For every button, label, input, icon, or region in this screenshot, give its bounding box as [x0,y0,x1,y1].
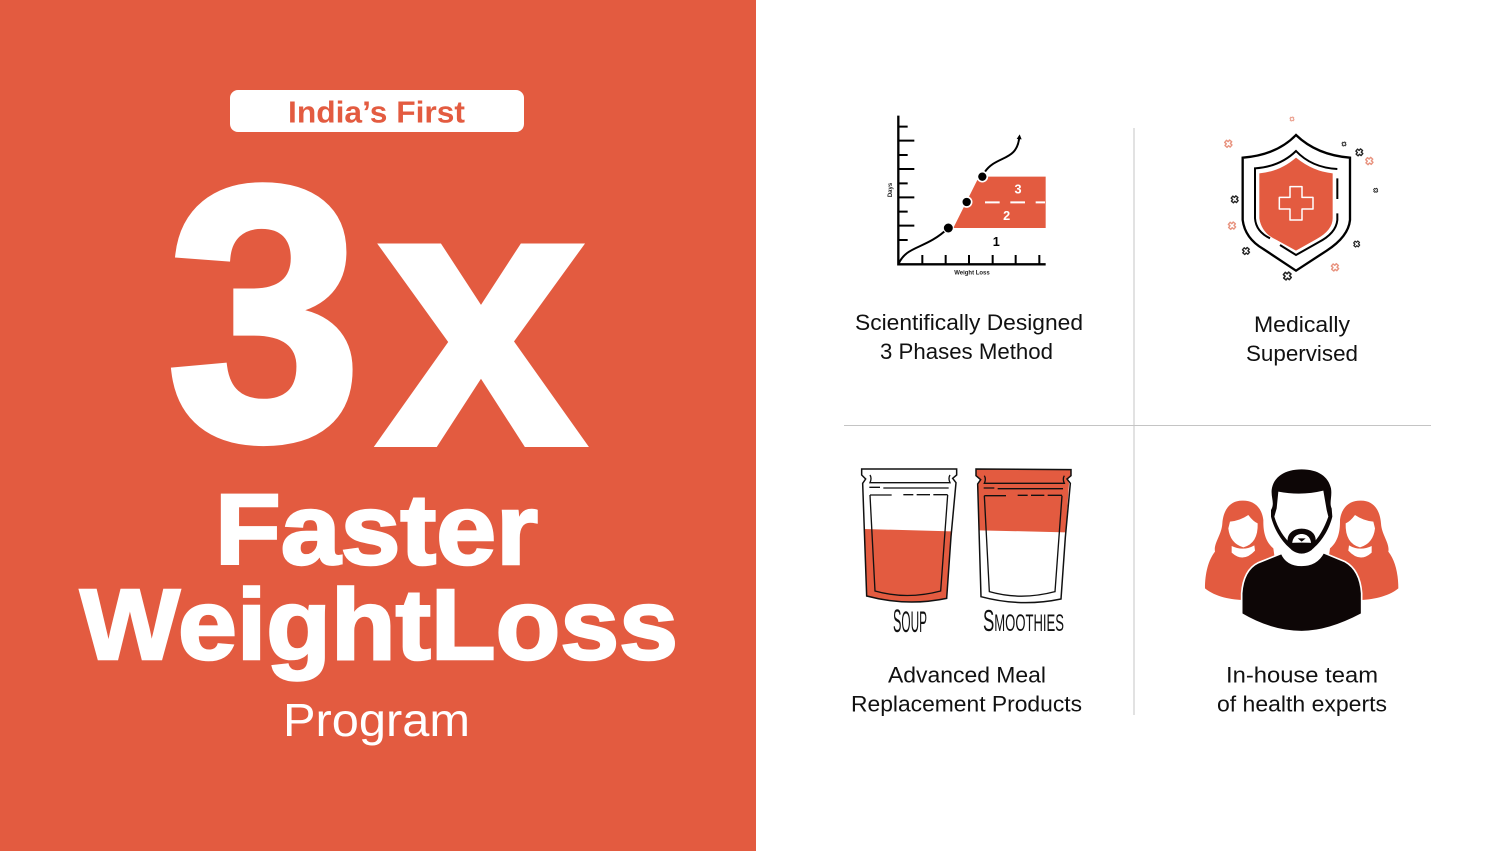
icon: medical shield [1223,116,1379,281]
caption: scientifically designed: Scientifically Designed [855,310,1083,335]
caption: advanced meal replacement products: Replacement Products [851,692,1082,716]
panel: meal replacement products: SOUP [893,603,927,639]
icon: soup and smoothies pouches [862,469,1071,603]
caption: medically supervised: Supervised [1246,341,1358,366]
badge: India's First: India’s First [288,94,465,130]
chart: weight loss phases [888,116,1046,277]
icon: smoothies pouch [976,469,1071,603]
icon: team of three people [1205,469,1398,632]
icon: soup pouch [862,469,957,602]
headline: 3x: x [378,106,587,522]
panel: in-house team [1205,469,1398,716]
panel background [0,0,756,851]
caption: scientifically designed: 3 Phases Method [880,339,1053,364]
icon: woman right [1328,501,1398,600]
subheading: Program: Program [283,694,470,746]
panel: 3 phases method [855,116,1083,364]
panel: medically supervised [1223,116,1379,366]
panel: meal replacement products [851,469,1082,716]
headline: Faster: Faster [215,474,538,586]
caption: advanced meal replacement products: Advanced Meal [888,662,1046,688]
chart: weight loss phases: 2 [1003,209,1010,223]
caption: in-house team of health experts: In-house team [1226,662,1378,688]
caption: medically supervised: Medically [1254,312,1350,337]
headline: WeightLoss: WeightLoss [80,569,678,681]
chart: weight loss phases: 3 [1014,183,1022,197]
icon: man centre [1242,469,1362,632]
label: Smoothies: SMOOTHIES [983,603,1064,638]
badge: India's First [230,90,524,132]
headline: 3x: 3 [167,111,362,516]
headline: 3x [167,106,587,522]
icon: woman left [1205,501,1275,600]
chart: weight loss phases: Days [888,182,894,197]
panel: left headline [0,0,756,851]
chart: weight loss phases: Weight Loss [954,271,990,277]
caption: in-house team of health experts: of health experts [1217,692,1387,716]
chart: weight loss phases: 1 [993,235,1000,249]
